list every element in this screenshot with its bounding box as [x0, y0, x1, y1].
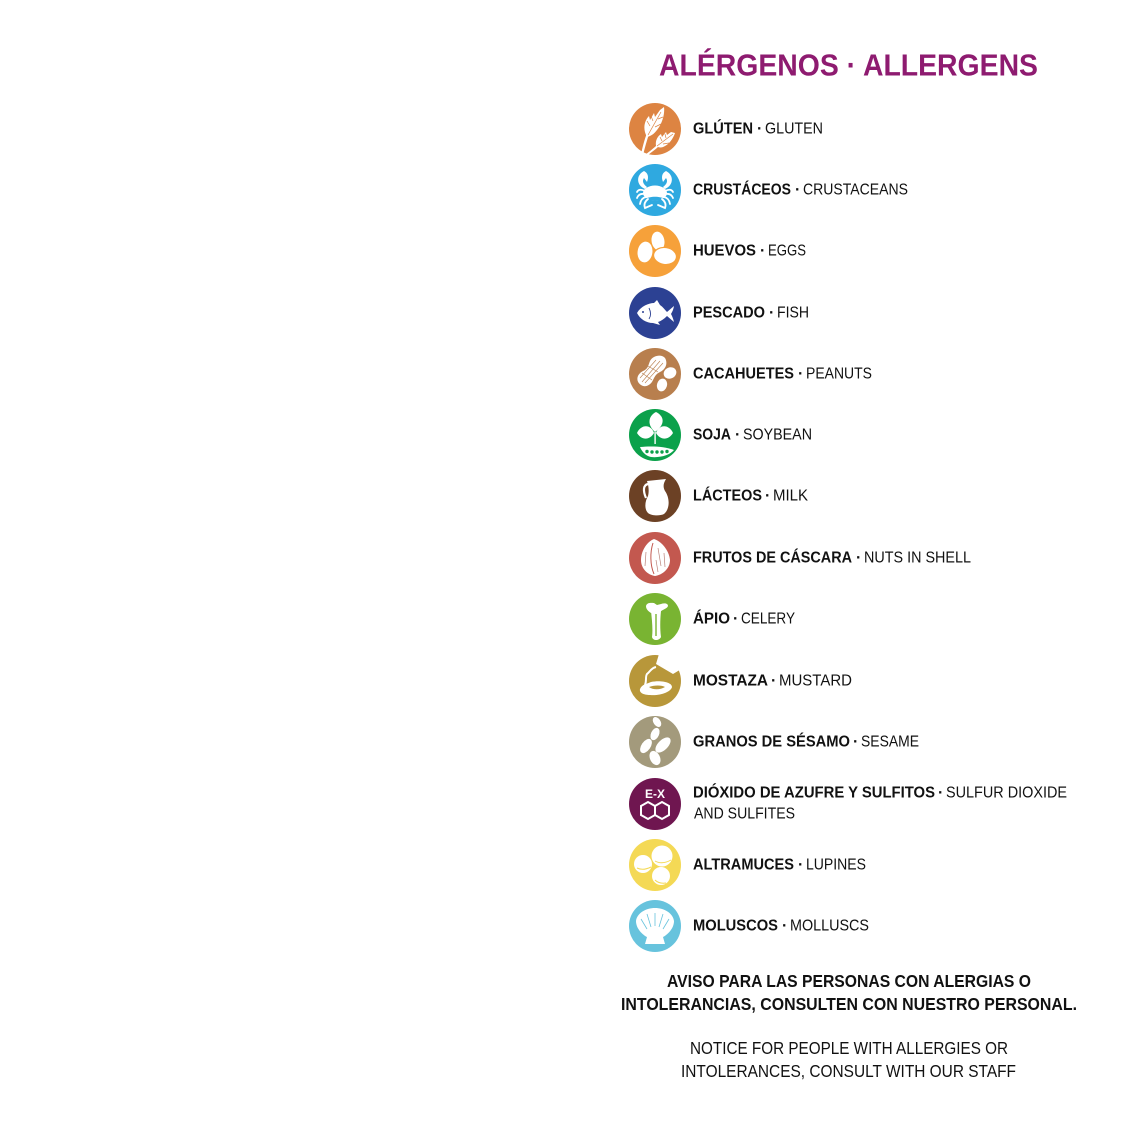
icon: soybean plant	[629, 409, 681, 461]
allergen: celery: CELERY	[741, 610, 795, 628]
allergen: milk	[629, 470, 808, 522]
allergen: nuts in shell: FRUTOS DE CÁSCARA	[693, 548, 852, 566]
allergen: sesame: GRANOS DE SÉSAMO	[693, 732, 850, 750]
allergen: mustard	[629, 654, 852, 707]
allergen: lupines: ALTRAMUCES	[693, 856, 794, 874]
icon: peanuts	[629, 348, 681, 400]
allergen: fish: PESCADO	[693, 304, 765, 322]
allergen: soybean	[629, 409, 812, 461]
allergen: sesame	[629, 715, 919, 768]
allergen: celery: ·	[733, 610, 738, 628]
allergen: gluten: ·	[757, 120, 762, 138]
notice: english: INTOLERANCES, CONSULT WITH OUR STAFF	[681, 1061, 1016, 1081]
title: ALÉRGENOS · ALLERGENS	[659, 48, 1038, 82]
allergen: lupines	[629, 839, 866, 891]
allergen: nuts in shell: ·	[856, 550, 861, 566]
icon: walnut	[629, 532, 681, 584]
allergen: crustaceans: CRUSTÁCEOS	[693, 180, 791, 198]
icon: sulfites molecule	[629, 778, 681, 830]
icon: lupin beans	[629, 839, 681, 891]
allergen: nuts in shell	[629, 532, 971, 584]
allergen: milk: LÁCTEOS	[693, 486, 762, 504]
allergen: molluscs	[629, 900, 869, 952]
allergen: sulfites: DIÓXIDO DE AZUFRE Y SULFITOS	[693, 782, 935, 802]
icon: celery	[629, 593, 681, 645]
allergen: gluten	[629, 103, 823, 156]
allergen: sulfites: ·	[938, 784, 943, 802]
allergen: nuts in shell: NUTS IN SHELL	[864, 550, 971, 566]
allergen: sesame: ·	[853, 734, 858, 750]
allergen: celery: ÁPIO	[693, 608, 730, 628]
allergen: mustard: MUSTARD	[779, 672, 852, 690]
allergen: mustard: MOSTAZA	[693, 672, 768, 690]
allergen: lupines: ·	[798, 856, 803, 874]
allergen: sulfites	[629, 778, 1067, 830]
allergen: celery	[629, 593, 795, 645]
allergen: molluscs: ·	[782, 918, 787, 934]
icon: sesame seeds	[629, 715, 681, 768]
allergen: milk: ·	[765, 488, 770, 504]
allergen: eggs	[629, 225, 806, 277]
allergen: lupines: LUPINES	[806, 856, 866, 874]
notice: spanish: INTOLERANCIAS, CONSULTEN CON NUESTRO PERSONAL.	[621, 994, 1077, 1014]
icon: wheat	[629, 103, 681, 156]
allergen: molluscs: MOLLUSCS	[790, 918, 869, 934]
allergen: soybean: SOJA	[693, 426, 731, 444]
icon: mustard	[629, 654, 683, 707]
notice: english	[681, 1038, 1016, 1081]
allergen: molluscs: MOLUSCOS	[693, 918, 778, 934]
icon: milk jug	[629, 470, 681, 522]
allergen: fish: ·	[769, 304, 774, 322]
allergen: peanuts: ·	[798, 366, 803, 382]
allergen: mustard: ·	[771, 672, 776, 690]
allergen: eggs: ·	[760, 242, 765, 260]
allergen: sulfites: SULFUR DIOXIDE	[946, 784, 1067, 802]
allergen: fish	[629, 287, 809, 339]
allergen: crustaceans: CRUSTACEANS	[803, 182, 908, 198]
allergen: soybean: ·	[735, 426, 740, 444]
notice: spanish: AVISO PARA LAS PERSONAS CON ALERGIAS O	[667, 971, 1031, 991]
allergen: gluten: GLUTEN	[765, 120, 823, 138]
icon: crab	[629, 164, 681, 216]
icon: fish	[629, 287, 681, 339]
allergen: gluten: GLÚTEN	[693, 118, 753, 138]
allergen: fish: FISH	[777, 304, 809, 322]
allergen: sulfites: AND SULFITES	[694, 806, 795, 822]
icon: shell	[629, 900, 681, 952]
allergen: milk: MILK	[773, 488, 808, 504]
allergen: crustaceans: ·	[795, 182, 800, 198]
allergen: eggs: EGGS	[768, 242, 806, 260]
allergen: crustaceans	[629, 164, 908, 216]
allergen: eggs: HUEVOS	[693, 242, 756, 260]
icon: eggs	[629, 225, 681, 277]
allergen: sesame: SESAME	[861, 734, 919, 750]
allergen: peanuts	[629, 348, 872, 400]
notice: spanish	[621, 971, 1077, 1014]
allergen: peanuts: CACAHUETES	[693, 366, 794, 382]
notice: english: NOTICE FOR PEOPLE WITH ALLERGIES OR	[690, 1038, 1008, 1058]
allergen: peanuts: PEANUTS	[806, 366, 872, 382]
allergen: soybean: SOYBEAN	[743, 426, 812, 444]
icon: sulfites molecule: E-X	[645, 787, 665, 801]
